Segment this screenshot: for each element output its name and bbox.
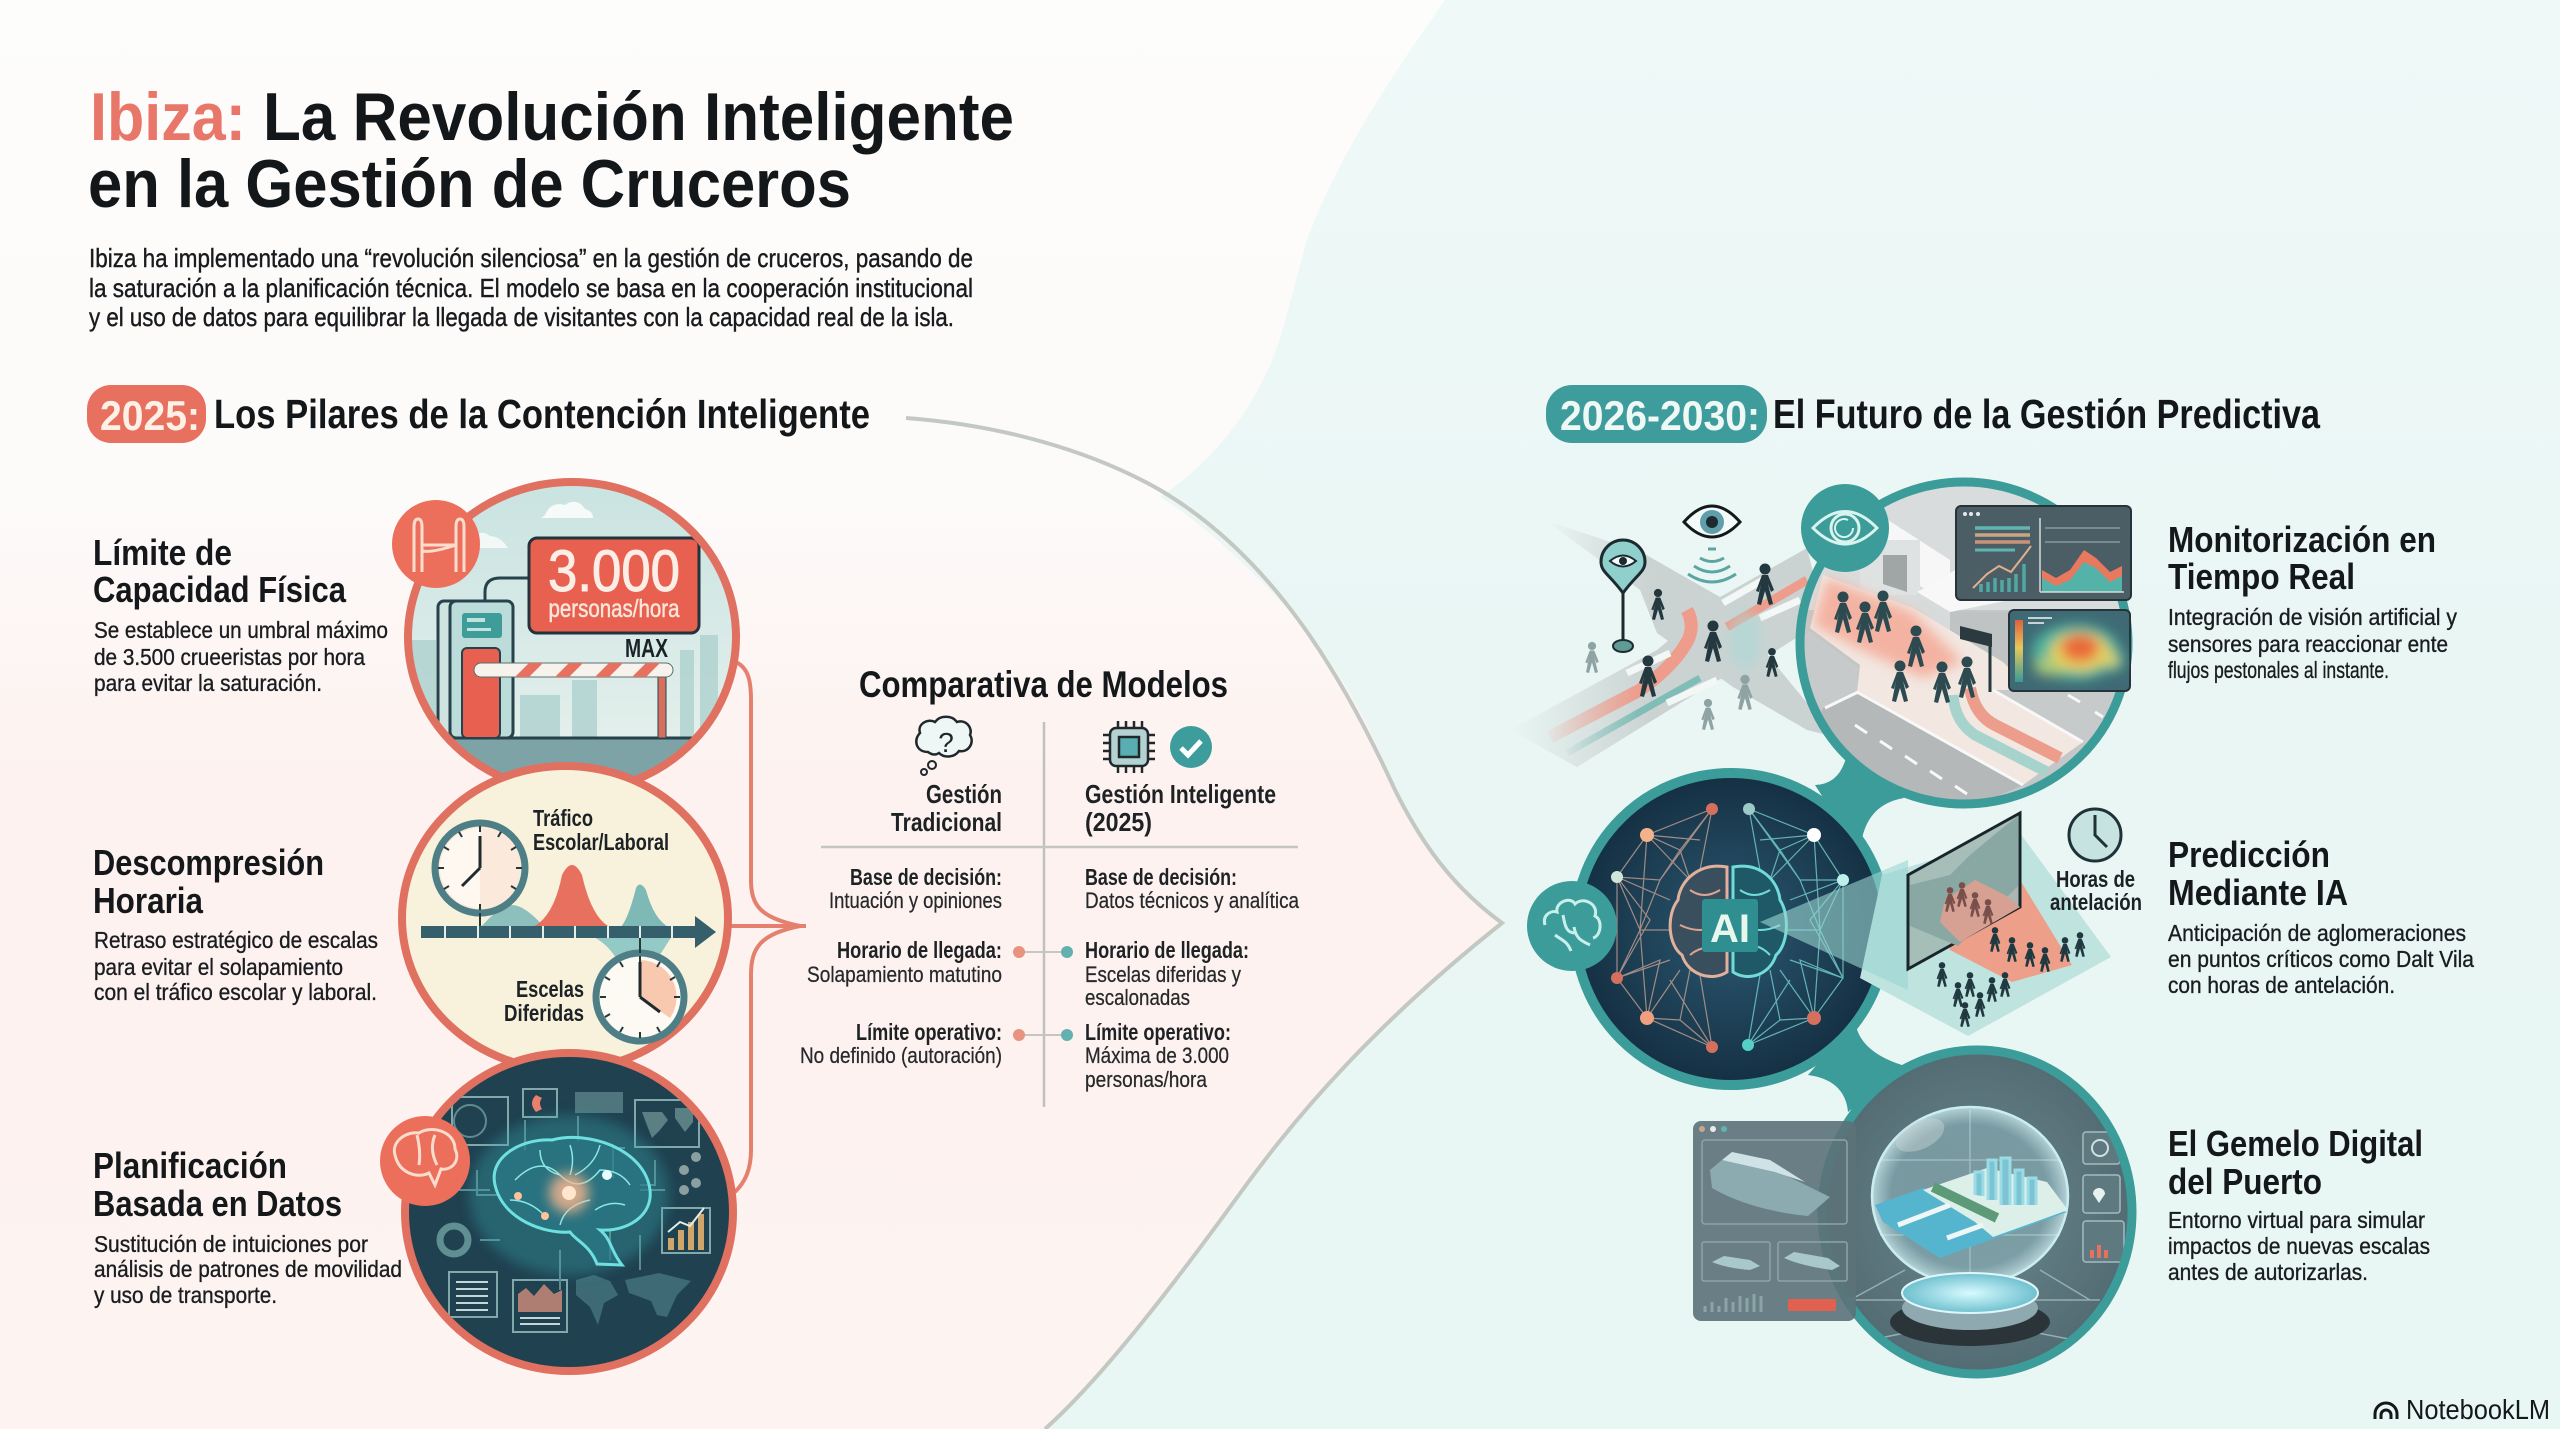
neural network bbox=[1611, 803, 1849, 1053]
AI chip: AI bbox=[1710, 907, 1750, 951]
comparison: Comparativa de Modelos bbox=[800, 664, 1299, 1107]
clock: morning bbox=[435, 823, 525, 926]
column head: smart: (2025) bbox=[1085, 807, 1152, 837]
speech-bubble outline pointing right bbox=[906, 418, 1502, 1429]
panel: dashboard bbox=[1956, 506, 2131, 600]
label: Tráfico Escolar/Laboral bbox=[533, 805, 669, 855]
sign: 3.000 personas/hora: 3.000 bbox=[548, 539, 680, 604]
heading: 2026-2030 future: 2026-2030: bbox=[1560, 392, 1760, 439]
text: Descompresión Horaria: para evitar el solapamiento bbox=[94, 954, 343, 980]
text: Monitorización en Tiempo Real: Tiempo Real bbox=[2168, 556, 2355, 597]
comparison title: Comparativa de Modelos bbox=[859, 664, 1228, 705]
text: Descompresión Horaria: con el tráfico escolar y laboral. bbox=[94, 979, 377, 1005]
icon: brain badge bbox=[380, 1116, 470, 1206]
bracket arrow from pillars to comparison bbox=[728, 662, 806, 1192]
text: El Gemelo Digital del Puerto: del Puerto bbox=[2168, 1161, 2322, 1202]
traditional rows: Horario de llegada: bbox=[837, 937, 1002, 963]
heading: 2025 pillars: Los Pilares de la Contención Inteligente bbox=[214, 391, 870, 437]
text: Límite de Capacidad Física: Se establece un umbral máximo bbox=[94, 617, 388, 643]
heading: 2026-2030 future bbox=[1546, 385, 2321, 443]
text: Planificación Basada en Datos: análisis de patrones de movilidad bbox=[94, 1256, 402, 1282]
illustration: digital twin circle bbox=[1693, 1050, 2132, 1374]
icon: eye with signal bbox=[1684, 506, 1740, 582]
text: Descompresión Horaria: Descompresión bbox=[93, 842, 324, 883]
smart rows: escalonadas bbox=[1085, 985, 1190, 1010]
text: Predicción Mediante IA: Anticipación de aglomeraciones bbox=[2168, 920, 2466, 946]
smart rows bbox=[1085, 864, 1299, 1092]
illustration: capacity barrier circle: MAX bbox=[625, 633, 668, 663]
text: Predicción Mediante IA: en puntos críticos como Dalt Vila bbox=[2168, 946, 2475, 972]
traditional rows: No definido (autoración) bbox=[800, 1043, 1002, 1068]
label: Tráfico Escolar/Laboral: Tráfico bbox=[533, 805, 593, 831]
icon: head/brain badge bbox=[1527, 881, 1617, 971]
traditional rows: Base de decisión: bbox=[850, 864, 1002, 890]
smart rows: Escelas diferidas y bbox=[1085, 962, 1242, 987]
heading: 2025 pillars bbox=[87, 385, 870, 443]
icon: clock with label Horas de antelación bbox=[2050, 809, 2142, 915]
title: Ibiza: bbox=[90, 79, 246, 155]
connector: monitoring to AI bbox=[1815, 748, 1904, 855]
icon: gate badge bbox=[392, 500, 480, 588]
heading: 2026-2030 future: El Futuro de la Gestión Predictiva bbox=[1773, 391, 2321, 437]
text: Predicción Mediante IA: Mediante IA bbox=[2168, 872, 2348, 913]
text: Monitorización en Tiempo Real bbox=[2168, 519, 2457, 683]
smart rows: Límite operativo: bbox=[1085, 1019, 1231, 1045]
title: La Revolución Inteligente bbox=[263, 79, 1014, 155]
row connectors bbox=[1013, 946, 1073, 1041]
text: El Gemelo Digital del Puerto: impactos de nuevas escalas bbox=[2168, 1233, 2430, 1259]
traditional rows bbox=[800, 864, 1002, 1068]
intro paragraph: la saturación a la planificación técnica. El modelo se basa en la cooperación institucional bbox=[89, 273, 973, 303]
icon: thought cloud bbox=[916, 717, 972, 775]
text: Monitorización en Tiempo Real: sensores para reaccionar ente bbox=[2168, 631, 2448, 657]
text: Predicción Mediante IA: con horas de antelación. bbox=[2168, 972, 2395, 998]
sign: 3.000 personas/hora bbox=[529, 538, 699, 633]
text: Monitorización en Tiempo Real: flujos pestonales al instante. bbox=[2168, 657, 2389, 683]
connector: AI to digital twin bbox=[1808, 1020, 1905, 1112]
icon: check bbox=[1170, 726, 1212, 768]
text: El Gemelo Digital del Puerto: Entorno virtual para simular bbox=[2168, 1207, 2425, 1233]
brain halves bbox=[1670, 866, 1727, 977]
label: Escelas Diferidas bbox=[504, 976, 584, 1026]
digital twin globe bbox=[1872, 1107, 2068, 1285]
text: Planificación Basada en Datos: y uso de transporte. bbox=[94, 1282, 277, 1308]
text: Descompresión Horaria: Horaria bbox=[93, 880, 204, 921]
text: El Gemelo Digital del Puerto: El Gemelo Digital bbox=[2168, 1123, 2423, 1164]
illustration: AI prediction circle bbox=[1527, 773, 2111, 1085]
text: Límite de Capacidad Física: de 3.500 crueeristas por hora bbox=[94, 644, 366, 670]
title bbox=[88, 79, 1014, 222]
text: Planificación Basada en Datos bbox=[93, 1145, 402, 1308]
smart rows: Máxima de 3.000 bbox=[1085, 1043, 1229, 1068]
text: Descompresión Horaria: Retraso estratégico de escalas bbox=[94, 927, 378, 953]
clock: deferred bbox=[596, 938, 684, 1041]
column head: traditional: Gestión bbox=[926, 779, 1002, 809]
column head: traditional: Tradicional bbox=[891, 807, 1002, 837]
text: Límite de Capacidad Física: para evitar la saturación. bbox=[94, 670, 322, 696]
icon: chip bbox=[1103, 721, 1155, 773]
smart rows: Horario de llegada: bbox=[1085, 937, 1249, 963]
label: Escelas Diferidas: Diferidas bbox=[504, 1000, 584, 1026]
text: El Gemelo Digital del Puerto bbox=[2168, 1123, 2430, 1285]
column head: smart bbox=[1085, 779, 1276, 837]
intro paragraph bbox=[89, 243, 973, 332]
icon: sensor pin bbox=[1601, 540, 1645, 652]
heading: 2025 pillars: 2025: bbox=[100, 392, 200, 439]
icon: eye badge bbox=[1801, 484, 1889, 572]
projection plane with crowd bbox=[1760, 813, 2111, 1036]
column head: smart: Gestión Inteligente bbox=[1085, 779, 1276, 809]
text: Monitorización en Tiempo Real: Monitorización en bbox=[2168, 519, 2436, 560]
text: Límite de Capacidad Física: Capacidad Física bbox=[93, 569, 347, 610]
pedestrians bbox=[1639, 564, 1778, 697]
traditional rows: Límite operativo: bbox=[856, 1019, 1002, 1045]
column head: traditional bbox=[891, 779, 1002, 837]
icon: clock with label Horas de antelación: antelación bbox=[2050, 889, 2142, 915]
label: Escelas Diferidas: Escelas bbox=[516, 976, 584, 1002]
icon: clock with label Horas de antelación: Horas de bbox=[2056, 866, 2135, 892]
side panels bbox=[2083, 1132, 2124, 1262]
digital twin pedestal bbox=[1890, 1273, 2050, 1346]
smart rows: personas/hora bbox=[1085, 1067, 1207, 1092]
illustration: data brain circle bbox=[380, 1053, 733, 1371]
illustration: street crossing with sensors bbox=[1510, 506, 1835, 767]
text: Planificación Basada en Datos: Sustitución de intuiciones por bbox=[94, 1231, 368, 1257]
title: en la Gestión de Cruceros bbox=[88, 146, 851, 222]
intro paragraph: Ibiza ha implementado una “revolución silenciosa” en la gestión de cruceros, pasando de bbox=[89, 243, 973, 273]
traditional rows: Solapamiento matutino bbox=[807, 962, 1002, 987]
background: right mint region bbox=[1045, 0, 2560, 1429]
smart rows: Base de decisión: bbox=[1085, 864, 1237, 890]
label: Tráfico Escolar/Laboral: Escolar/Laboral bbox=[533, 829, 669, 855]
illustration: time decompression circle bbox=[402, 766, 728, 1070]
text: Límite de Capacidad Física: Límite de bbox=[93, 532, 232, 573]
text: Límite de Capacidad Física bbox=[93, 532, 388, 696]
text: Predicción Mediante IA: Predicción bbox=[2168, 834, 2330, 875]
traditional rows: Intuación y opiniones bbox=[829, 888, 1002, 913]
icon: thought cloud: ? bbox=[938, 727, 954, 758]
stroke ring bbox=[1575, 773, 1887, 1085]
AI chip bbox=[1702, 899, 1758, 952]
illustration: real-time monitoring circle bbox=[1798, 475, 2140, 805]
text: Descompresión Horaria bbox=[93, 842, 378, 1005]
sign: 3.000 personas/hora: personas/hora bbox=[548, 595, 680, 623]
panel: heatmap bbox=[2009, 610, 2130, 691]
text: Planificación Basada en Datos: Planificación bbox=[93, 1145, 287, 1186]
text: El Gemelo Digital del Puerto: antes de autorizarlas. bbox=[2168, 1259, 2368, 1285]
illustration: capacity barrier circle bbox=[392, 480, 740, 800]
intro paragraph: y el uso de datos para equilibrar la llegada de visitantes con la capacidad real de la isla. bbox=[89, 302, 954, 332]
text: Planificación Basada en Datos: Basada en Datos bbox=[93, 1183, 342, 1224]
text: Predicción Mediante IA bbox=[2168, 834, 2475, 998]
smart rows: Datos técnicos y analítica bbox=[1085, 888, 1299, 913]
panel: ship dashboard bbox=[1693, 1121, 1856, 1321]
text: Monitorización en Tiempo Real: Integración de visión artificial y bbox=[2168, 604, 2457, 630]
